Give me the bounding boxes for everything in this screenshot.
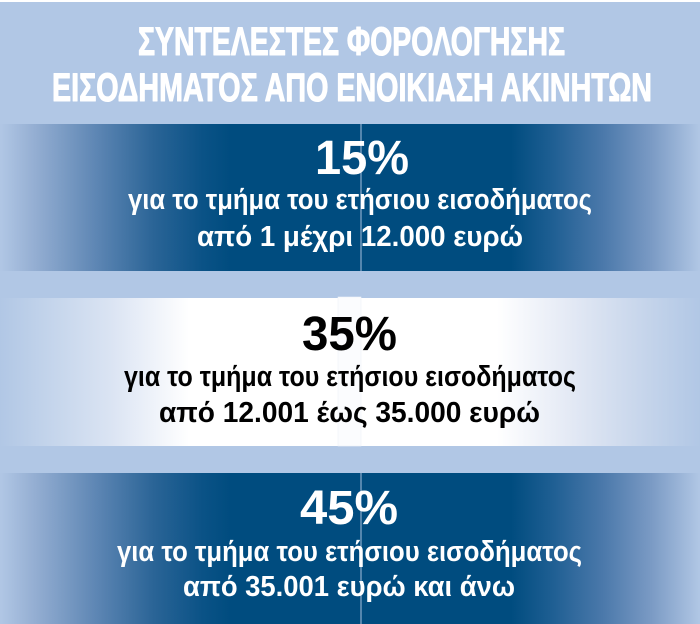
description: 35% bracket: από 12.001 έως 35.000 ευρώ <box>159 397 540 429</box>
rate: 45%: 45% <box>300 482 398 535</box>
description: 45% bracket: για το τμήμα του ετήσιου εισοδήματος <box>117 536 582 568</box>
description: 15% bracket <box>128 184 592 253</box>
description: 45% bracket: από 35.001 ευρώ και άνω <box>183 571 515 603</box>
title <box>52 20 652 110</box>
description: 45% bracket <box>117 536 582 603</box>
panel: 45% rate <box>0 473 700 624</box>
description: 15% bracket: από 1 μέχρι 12.000 ευρώ <box>197 221 523 253</box>
rate: 35%: 35% <box>302 308 397 361</box>
description: 35% bracket <box>124 361 576 429</box>
panel: 15% rate <box>0 124 700 271</box>
rate: 15%: 15% <box>315 132 409 185</box>
description: 15% bracket: για το τμήμα του ετήσιου εισοδήματος <box>128 184 592 216</box>
panel: 35% rate <box>0 297 700 446</box>
description: 35% bracket: για το τμήμα του ετήσιου εισοδήματος <box>124 361 576 393</box>
